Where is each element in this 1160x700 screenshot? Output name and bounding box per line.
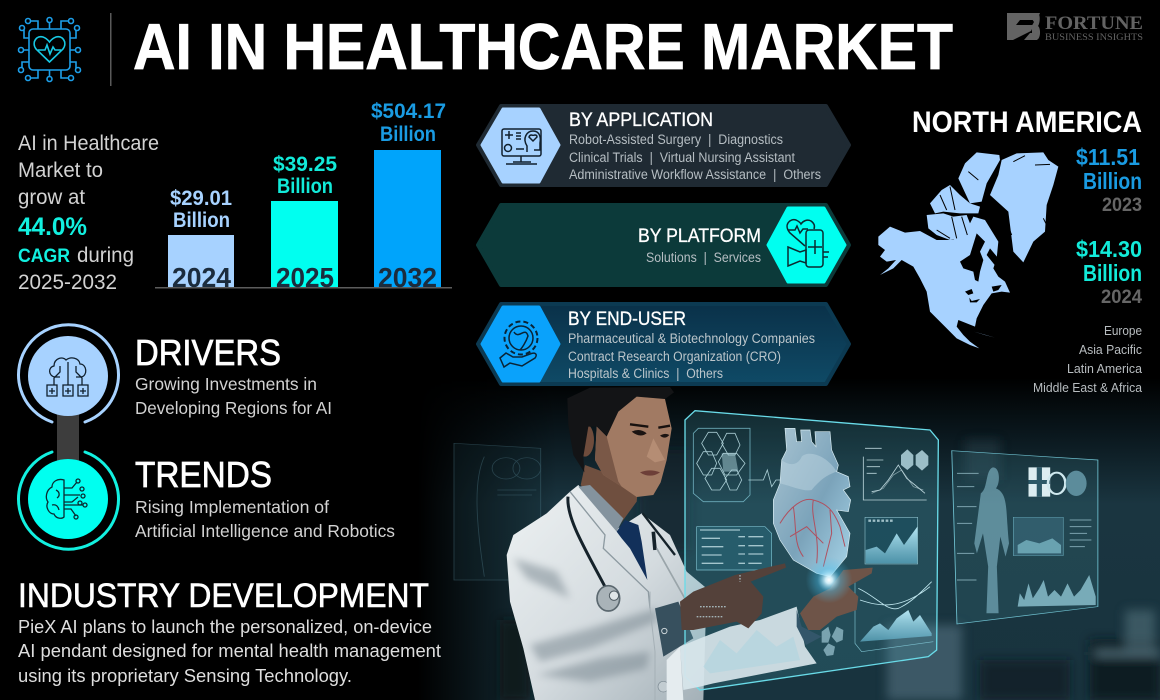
bar chart: market size: $29.01: [170, 187, 232, 210]
other regions list: Europe: [1104, 323, 1142, 338]
panel: by application: Administrative Workflow Assistance | Others: [569, 167, 821, 182]
icon: monitor with head: [502, 129, 541, 164]
lab coat: [507, 485, 707, 700]
other regions list: Latin America: [1067, 361, 1143, 376]
bar chart: market size: $39.25: [273, 153, 337, 176]
doctor neck: [581, 465, 638, 527]
panel: by end-user: [478, 304, 849, 384]
panel: by application: Clinical Trials | Virtual Nursing Assistant: [569, 150, 795, 165]
data list block: [697, 527, 772, 570]
drivers text: Growing Investments in: [135, 374, 317, 394]
drivers text: [135, 332, 332, 418]
panel: by platform: Solutions | Services: [646, 250, 761, 265]
panel: by platform: BY PLATFORM: [638, 226, 761, 247]
other regions list: [1033, 323, 1143, 395]
bar chart: market size: Billion: [277, 175, 333, 198]
bar chart: market size: 2032: [378, 262, 437, 293]
dim hologram panel behind doctor: [454, 443, 541, 580]
doctor face: [595, 397, 672, 497]
trends text: [135, 454, 395, 541]
bar chart: market size: Billion: [380, 123, 436, 146]
header icon: chip with heart: [18, 18, 80, 82]
growth statement: [18, 132, 159, 294]
area chart block: [865, 517, 918, 564]
logo: Fortune Business Insights: [1007, 13, 1143, 43]
growth statement: 44.0%: [18, 213, 87, 241]
shirt collar: [578, 485, 623, 532]
map: North America: [878, 152, 1058, 348]
regional values: 2024: [1101, 287, 1142, 308]
regional values: [1076, 144, 1142, 308]
line chart block: [863, 448, 927, 500]
growth statement: Market to: [18, 159, 103, 182]
stethoscope: [568, 497, 687, 611]
panel: by application: [478, 106, 849, 185]
industry development: using its proprietary Sensing Technology.: [18, 665, 352, 686]
growth statement: during: [77, 244, 134, 267]
glow between fingers: [806, 557, 852, 603]
coat fold shadows: [513, 558, 657, 682]
regional values: 2023: [1102, 195, 1142, 216]
panel: by application: Robot-Assisted Surgery | Diagnostics: [569, 132, 783, 147]
industry development: [18, 577, 441, 686]
doctor hair: [567, 387, 674, 472]
other regions list: Asia Pacific: [1079, 342, 1142, 357]
bar chart: market size: Billion: [173, 209, 230, 232]
regional values: Billion: [1083, 168, 1142, 194]
growth statement: CAGR: [18, 246, 70, 267]
necktie: [617, 520, 647, 580]
drivers text: DRIVERS: [135, 332, 281, 373]
lower area chart: [860, 610, 932, 642]
hexagon data block: [693, 428, 782, 502]
other hand: [800, 568, 873, 630]
bar chart: market size: 2024: [172, 262, 231, 293]
main hologram panel with heart: [667, 411, 938, 700]
other regions list: Middle East & Africa: [1033, 380, 1143, 395]
industry development: INDUSTRY DEVELOPMENT: [18, 577, 429, 615]
trends text: TRENDS: [135, 454, 272, 495]
growth statement: grow at: [18, 186, 85, 209]
heading: North America: NORTH AMERICA: [912, 106, 1142, 139]
bar chart: market size: $504.17: [371, 100, 446, 123]
bar chart: market size: 2025: [276, 262, 334, 293]
lower hexagons: [822, 627, 843, 656]
growth statement: AI in Healthcare: [18, 132, 159, 155]
panel: by application: BY APPLICATION: [569, 110, 713, 131]
panel: by end-user: Contract Research Organization (CRO): [568, 349, 781, 364]
panel: by end-user: Hospitals & Clinics | Others: [568, 366, 723, 381]
industry development: PieX AI plans to launch the personalized, on-device: [18, 616, 432, 637]
trends text: Artificial Intelligence and Robotics: [135, 521, 395, 541]
title: AI IN HEALTHCARE MARKET: [133, 10, 953, 83]
industry development: AI pendant designed for mental health management: [18, 640, 441, 661]
bar chart: market size: [155, 100, 452, 293]
panel: by end-user: BY END-USER: [568, 309, 686, 330]
anatomical heart: [773, 428, 851, 577]
regional values: $14.30: [1076, 236, 1142, 262]
hand pointing: [680, 563, 786, 630]
coat lapels: [570, 492, 650, 608]
doctor ear: [576, 423, 594, 457]
icon: gear and hand: [500, 322, 538, 367]
logo: Fortune Business Insights: BUSINESS INSIGHTS: [1045, 33, 1143, 43]
far sleeve: [680, 607, 817, 690]
connector between drivers and trends: [57, 412, 79, 464]
regional values: Billion: [1083, 260, 1142, 286]
logo: Fortune Business Insights: FORTUNE: [1045, 13, 1143, 34]
doctor figure: [507, 387, 707, 700]
curve chart: [858, 582, 932, 609]
icon: trends badge: [18, 452, 119, 549]
icon: phone with heart: [787, 220, 829, 267]
growth statement: 2025-2032: [18, 271, 117, 294]
icon: drivers badge: [18, 325, 119, 422]
sleeve cuff: [655, 602, 693, 657]
trends text: Rising Implementation of: [135, 497, 329, 517]
hologram panel: body scan: [952, 451, 1098, 624]
panel: by platform: [478, 205, 849, 285]
far cuff: [797, 610, 822, 645]
drivers text: Developing Regions for AI: [135, 398, 332, 418]
panel: by end-user: Pharmaceutical & Biotechnology Companies: [568, 331, 815, 346]
regional values: $11.51: [1076, 144, 1140, 170]
